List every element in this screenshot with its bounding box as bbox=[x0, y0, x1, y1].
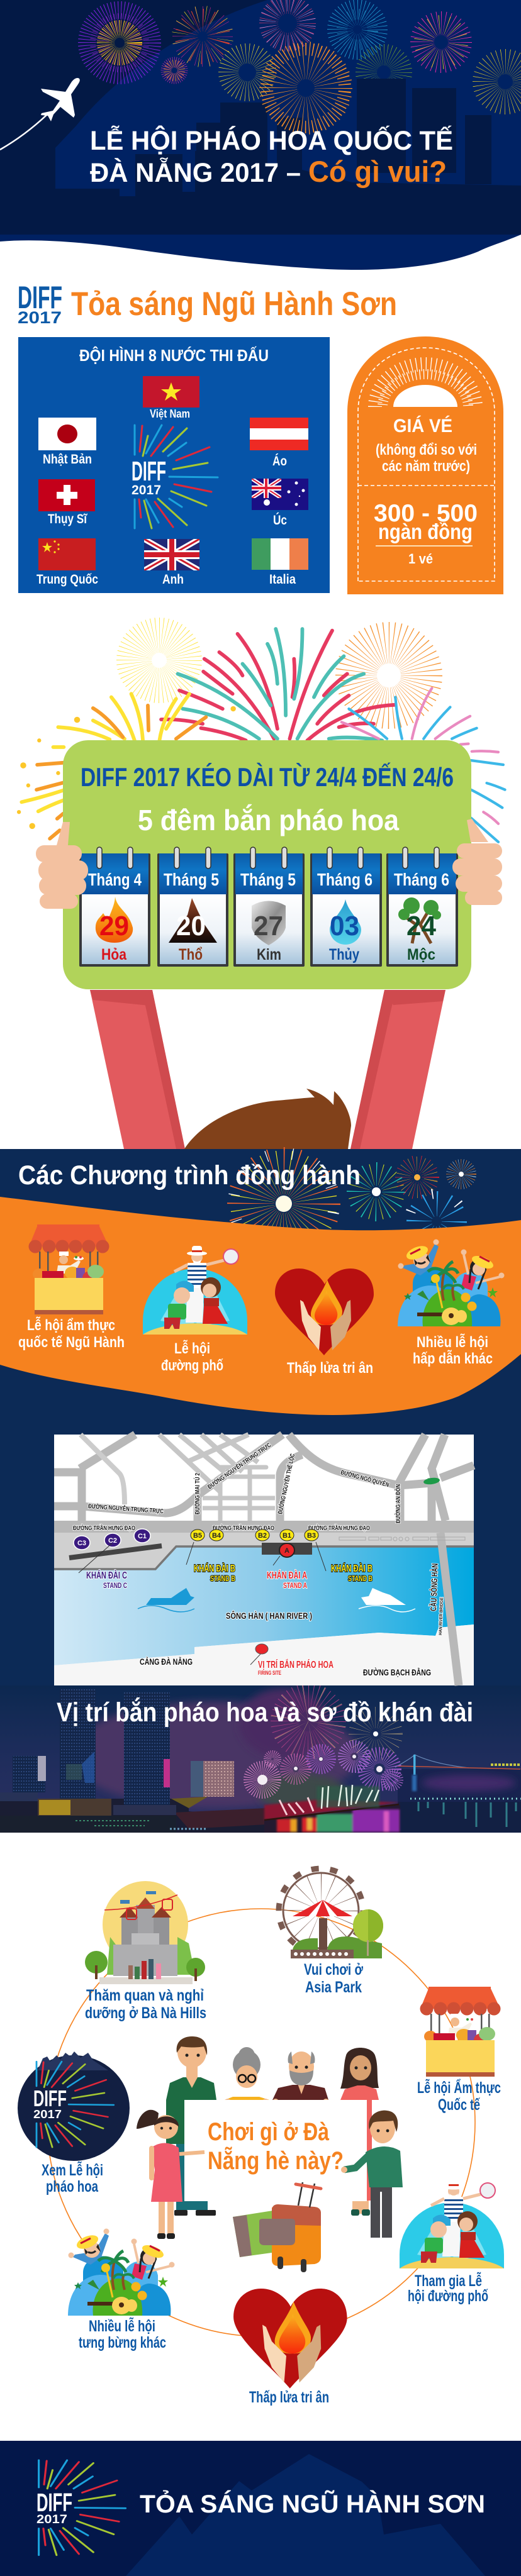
icon: suitcases bbox=[233, 2182, 321, 2272]
section heading: DIFF logo and slogan: Tỏa sáng Ngũ Hành Sơn bbox=[71, 286, 397, 323]
road labels: SÔNG HÀN ( HAN RIVER ) bbox=[226, 1610, 312, 1621]
programme: lighting gratitude bbox=[275, 1269, 374, 1377]
grandmother bbox=[225, 2047, 269, 2105]
activity ring bbox=[47, 1909, 475, 2336]
calendar: May 20: 20 bbox=[176, 911, 206, 941]
icon: sun bbox=[375, 364, 476, 407]
stand markers: B5 bbox=[193, 1532, 202, 1540]
activity: lighting gratitude: Thấp lửa tri ân bbox=[249, 2389, 329, 2406]
calendar: June 24: 24 bbox=[406, 911, 436, 941]
road labels: CẦU SÔNG HÀN bbox=[429, 1563, 440, 1611]
road labels: ĐƯỜNG AN ĐỒN bbox=[394, 1484, 402, 1523]
stand callouts: KHÁN ĐÀI B bbox=[194, 1562, 235, 1574]
calendar: June 3: 03 bbox=[330, 911, 359, 941]
stand callouts: KHÁN ĐÀI A bbox=[267, 1569, 307, 1581]
water right bbox=[398, 1769, 521, 1802]
road labels: ĐƯỜNG BẠCH ĐẰNG bbox=[363, 1667, 431, 1677]
calendar: April 29: Hỏa bbox=[101, 946, 127, 963]
ticket text: 1 vé bbox=[408, 551, 433, 567]
road labels: ĐƯỜNG MAI TÚ 2 bbox=[193, 1473, 201, 1514]
girl bbox=[137, 2110, 204, 2239]
flag: China bbox=[36, 538, 98, 587]
bridge bbox=[395, 1755, 469, 1768]
stand callouts: STAND B bbox=[348, 1574, 373, 1583]
activity: watching fireworks: DIFF bbox=[33, 2085, 67, 2111]
night photo of the river bbox=[0, 1685, 521, 1833]
activity: watching fireworks: Xem Lễ hội bbox=[42, 2160, 103, 2179]
stand A block bbox=[262, 1543, 312, 1555]
calendar: May 20: Thổ bbox=[179, 946, 203, 963]
stand markers: C2 bbox=[108, 1537, 117, 1545]
flag: Japan bbox=[38, 418, 96, 467]
calendar: May 27: Kim bbox=[257, 946, 281, 963]
footer: TỎA SÁNG NGŨ HÀNH SƠN bbox=[140, 2489, 485, 2518]
stand markers: C1 bbox=[138, 1533, 147, 1540]
footer bbox=[0, 2441, 521, 2576]
streets bbox=[54, 1435, 474, 1521]
stand markers: B4 bbox=[212, 1532, 221, 1540]
flag: Australia bbox=[252, 479, 308, 528]
section heading: DIFF logo and slogan bbox=[18, 280, 397, 327]
programme: street festival: Lễ hội bbox=[174, 1340, 210, 1357]
calendar: April 29: 29 bbox=[99, 911, 129, 941]
calendar: June 3: Tháng 6 bbox=[317, 870, 373, 889]
programme: food festival bbox=[18, 1224, 125, 1351]
programme: other festivals: Nhiều lễ hội bbox=[417, 1333, 488, 1351]
activity: other festivals: Nhiều lễ hội bbox=[89, 2316, 155, 2335]
DIFF logo: DIFF bbox=[132, 456, 166, 487]
ticket text: 300 - 500 bbox=[374, 500, 478, 527]
calendar: June 3 bbox=[310, 847, 382, 967]
ticket text: (không đổi so với bbox=[376, 441, 477, 458]
flag: Switzerland bbox=[38, 479, 95, 526]
flag: Italy bbox=[252, 538, 308, 587]
ticket text: GIÁ VÉ bbox=[393, 415, 452, 436]
river bbox=[54, 1546, 474, 1665]
stand callouts: KHÁN ĐÀI C bbox=[86, 1569, 127, 1581]
section heading: programmes: Các Chương trình đồng hành bbox=[18, 1160, 361, 1191]
left shore bbox=[0, 1799, 279, 1833]
title: ĐÀ NẴNG 2017 – bbox=[90, 158, 301, 188]
calendar: May 20: Tháng 5 bbox=[164, 870, 219, 889]
calendar: May 20 bbox=[157, 847, 228, 967]
boy bbox=[341, 2111, 403, 2238]
header fireworks bbox=[87, 1, 521, 130]
footer: DIFF bbox=[36, 2488, 72, 2517]
title bbox=[90, 125, 453, 188]
mother bbox=[340, 2048, 379, 2216]
fireworks above programmes bbox=[225, 1145, 472, 1262]
stand callouts: KHÁN ĐÀI B bbox=[331, 1562, 373, 1574]
board subheading: 5 đêm bắn pháo hoa bbox=[138, 804, 399, 836]
activity: watching fireworks: 2017 bbox=[33, 2108, 62, 2121]
fireworks behind board bbox=[17, 629, 505, 842]
activity: street festival bbox=[400, 2180, 504, 2305]
ticket text: ngàn đồng bbox=[378, 520, 473, 544]
activity: food festival: Quốc tế bbox=[438, 2096, 480, 2114]
programme: street festival bbox=[143, 1246, 247, 1374]
stand markers bbox=[74, 1529, 318, 1557]
stand markers: A bbox=[284, 1547, 289, 1555]
flag: Austria bbox=[250, 418, 308, 469]
map: fireworks site and stands bbox=[54, 1435, 474, 1685]
stand callouts: STAND B bbox=[210, 1574, 235, 1583]
panel heading: ĐỘI HÌNH 8 NƯỚC THI ĐẤU bbox=[79, 346, 269, 365]
road labels: ĐƯỜNG NGUYỄN THẾ LỘC bbox=[276, 1453, 296, 1515]
red quay and reflections bbox=[264, 1800, 400, 1820]
section heading: DIFF logo and slogan: 2017 bbox=[18, 308, 62, 327]
activity: street festival: hội đường phố bbox=[408, 2287, 488, 2305]
stand markers: B1 bbox=[283, 1532, 291, 1540]
calendar: April 29 bbox=[79, 847, 150, 967]
programme: food festival: Lễ hội ẩm thực bbox=[27, 1316, 115, 1334]
programme: other festivals: hấp dẫn khác bbox=[413, 1350, 493, 1367]
calendar: June 24 bbox=[386, 847, 458, 967]
flag: Vietnam: Việt Nam bbox=[150, 408, 190, 420]
hair of the sign holder bbox=[184, 1089, 351, 1149]
stand markers: B3 bbox=[307, 1532, 316, 1540]
calendar: May 27 bbox=[233, 847, 305, 967]
firing site marker bbox=[250, 1644, 333, 1676]
programme: other festivals bbox=[398, 1239, 505, 1367]
calendar: June 3: Thủy bbox=[329, 946, 359, 963]
road labels: ĐƯỜNG NGUYỄN TRUNG TRỰC bbox=[88, 1502, 164, 1515]
programme: lighting gratitude: Thấp lửa tri ân bbox=[287, 1360, 373, 1377]
DIFF logo bbox=[132, 425, 218, 528]
activity: other festivals: tưng bừng khác bbox=[79, 2334, 166, 2351]
flag: Australia: Úc bbox=[273, 513, 287, 528]
activity: Asia Park: Vui chơi ở bbox=[304, 1961, 363, 1979]
flag: China: Trung Quốc bbox=[36, 572, 98, 587]
icon: boats bbox=[138, 1588, 415, 1612]
stand markers: B2 bbox=[258, 1532, 267, 1540]
flag: UK bbox=[144, 539, 199, 587]
family holding sign bbox=[137, 2036, 403, 2272]
icon: airplane with trail bbox=[0, 78, 80, 150]
activity: other festivals bbox=[68, 2229, 175, 2351]
activity: Ba Na Hills: Thăm quan và nghỉ bbox=[86, 1987, 204, 2004]
road labels: ĐƯỜNG NGÔ QUYỀN bbox=[340, 1468, 390, 1489]
stand callouts bbox=[79, 1542, 373, 1590]
arms holding the board bbox=[90, 990, 445, 1149]
grandfather bbox=[272, 2051, 329, 2105]
flag: Italy: Italia bbox=[269, 572, 296, 587]
ticket text bbox=[374, 415, 478, 567]
calendar: June 24: Mộc bbox=[407, 946, 435, 963]
activity: street festival: Tham gia Lễ bbox=[415, 2271, 482, 2290]
section background: navy bbox=[0, 1149, 521, 1833]
road labels: ĐƯỜNG NGUYỄN TRUNG TRỰC bbox=[206, 1441, 272, 1491]
sign: Chơi gì ở Đà bbox=[208, 2118, 330, 2146]
flag: Japan: Nhật Bản bbox=[43, 452, 92, 467]
activity: Ba Na Hills: dưỡng ở Bà Nà Hills bbox=[85, 2004, 206, 2022]
activity: lighting gratitude bbox=[233, 2289, 347, 2406]
firing site marker: VỊ TRÍ BẮN PHÁO HOA bbox=[258, 1658, 333, 1670]
title: LỄ HỘI PHÁO HOA QUỐC TẾ bbox=[90, 125, 453, 156]
header background bbox=[0, 0, 521, 270]
title: Có gì vui? bbox=[308, 155, 447, 188]
programme: food festival: quốc tế Ngũ Hành bbox=[18, 1334, 125, 1351]
calendar: June 24: Tháng 6 bbox=[394, 870, 449, 889]
activity: Ba Na Hills bbox=[85, 1881, 206, 2022]
flag: Vietnam bbox=[143, 376, 199, 420]
stand callouts: STAND A bbox=[283, 1581, 307, 1590]
DIFF logo: 2017 bbox=[132, 483, 161, 497]
section heading: DIFF logo and slogan: DIFF bbox=[18, 280, 62, 315]
sign bbox=[184, 2100, 367, 2201]
programme: street festival: đường phố bbox=[161, 1357, 223, 1374]
flag: UK: Anh bbox=[162, 572, 184, 587]
road labels: ĐƯỜNG TRẦN HƯNG ĐẠO bbox=[308, 1524, 370, 1532]
activity: food festival bbox=[417, 1987, 501, 2114]
flag: Switzerland: Thụy Sĩ bbox=[48, 512, 87, 526]
panel: ticket price bbox=[347, 336, 503, 594]
ticket text: các năm trước) bbox=[382, 458, 470, 475]
right hand bbox=[452, 819, 502, 905]
road labels: CẢNG ĐÀ NẴNG bbox=[140, 1657, 193, 1667]
panel: orange programmes band bbox=[0, 1197, 521, 1415]
firing site marker: FIRING SITE bbox=[258, 1670, 281, 1676]
Tran Hung Dao road and quay bbox=[54, 1521, 474, 1533]
stand markers: C3 bbox=[77, 1540, 86, 1547]
fireworks bbox=[251, 1697, 399, 1815]
flag: Austria: Áo bbox=[272, 454, 287, 469]
board: five nights bbox=[63, 740, 471, 989]
footer: 2017 bbox=[36, 2513, 67, 2526]
left hand bbox=[36, 822, 88, 909]
calendar: April 29: Tháng 4 bbox=[88, 870, 142, 889]
calendar: May 27: 27 bbox=[254, 911, 283, 941]
shoreline lights bbox=[410, 1797, 521, 1800]
panel: 8 teams bbox=[18, 337, 330, 593]
calendar: May 27: Tháng 5 bbox=[240, 870, 296, 889]
road labels: HAN RIVER BRIDGE bbox=[439, 1597, 444, 1635]
road labels: ĐƯỜNG TRẦN HƯNG ĐẠO bbox=[73, 1524, 135, 1532]
road labels bbox=[73, 1441, 444, 1677]
stand callouts: STAND C bbox=[103, 1581, 127, 1590]
sign: Nẵng hè này? bbox=[208, 2146, 344, 2175]
activity: Asia Park: Asia Park bbox=[305, 1979, 362, 1996]
tall man bbox=[166, 2036, 216, 2216]
road labels: ĐƯỜNG TRẦN HƯNG ĐẠO bbox=[213, 1524, 274, 1532]
activity: watching fireworks: pháo hoa bbox=[46, 2178, 99, 2196]
activity: watching fireworks bbox=[18, 2051, 130, 2196]
activity: Asia Park bbox=[279, 1868, 383, 1996]
